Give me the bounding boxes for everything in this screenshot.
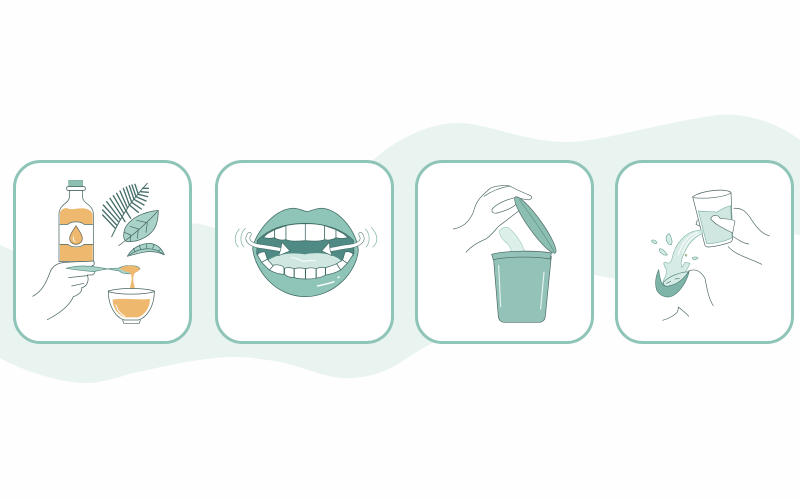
icon: hand on lid bbox=[453, 186, 531, 252]
icon: bowl of oil bbox=[108, 288, 154, 323]
icon: right motion lines bbox=[365, 228, 377, 247]
panel 4 card bbox=[616, 162, 792, 342]
icon: hand holding glass bbox=[696, 208, 769, 264]
icon: hand holding spoon bbox=[33, 261, 95, 320]
icon: mouth interior bbox=[257, 223, 354, 272]
panel 4: rinsing with water bbox=[616, 162, 792, 342]
icon: oil bottle bbox=[59, 180, 93, 262]
icon: broad leaf bbox=[119, 210, 158, 246]
icon: bin bbox=[492, 251, 551, 322]
panel 1 card bbox=[14, 162, 190, 342]
icon: lips bbox=[253, 208, 358, 297]
icon: small leaf bbox=[127, 243, 164, 256]
panel 3: spitting into bin bbox=[416, 162, 592, 342]
icon: lower teeth bbox=[257, 252, 353, 279]
panel 4 illustration bbox=[652, 190, 769, 320]
panel 1: oil swish preparation bbox=[14, 162, 190, 342]
panel 2: swishing mouth bbox=[216, 162, 392, 342]
icon: glass of water bbox=[693, 190, 733, 247]
icon: left swish arrow bbox=[248, 234, 290, 256]
panel 2 illustration bbox=[235, 208, 377, 297]
background wave blob bbox=[0, 115, 800, 383]
icon: upper teeth bbox=[263, 224, 348, 241]
icon: water stream and splash bbox=[652, 230, 703, 283]
icon: palm frond bbox=[103, 183, 148, 237]
icon: spoon bbox=[66, 266, 140, 291]
panel 3 card bbox=[416, 162, 592, 342]
icon: tissue bbox=[499, 227, 526, 256]
panel 2 card bbox=[216, 162, 392, 342]
icon: right swish arrow bbox=[322, 234, 362, 256]
icon: open lid bbox=[510, 193, 561, 257]
icon: tongue bbox=[265, 253, 342, 276]
panel 3 illustration bbox=[453, 186, 561, 322]
icon: left motion lines bbox=[235, 228, 245, 247]
icon: mouth receiving water bbox=[656, 270, 689, 297]
icon: lip shine bbox=[317, 277, 339, 286]
panel 1 illustration bbox=[33, 180, 164, 323]
icon: face outline bbox=[663, 270, 713, 320]
icon: tongue highlight bbox=[292, 258, 315, 261]
